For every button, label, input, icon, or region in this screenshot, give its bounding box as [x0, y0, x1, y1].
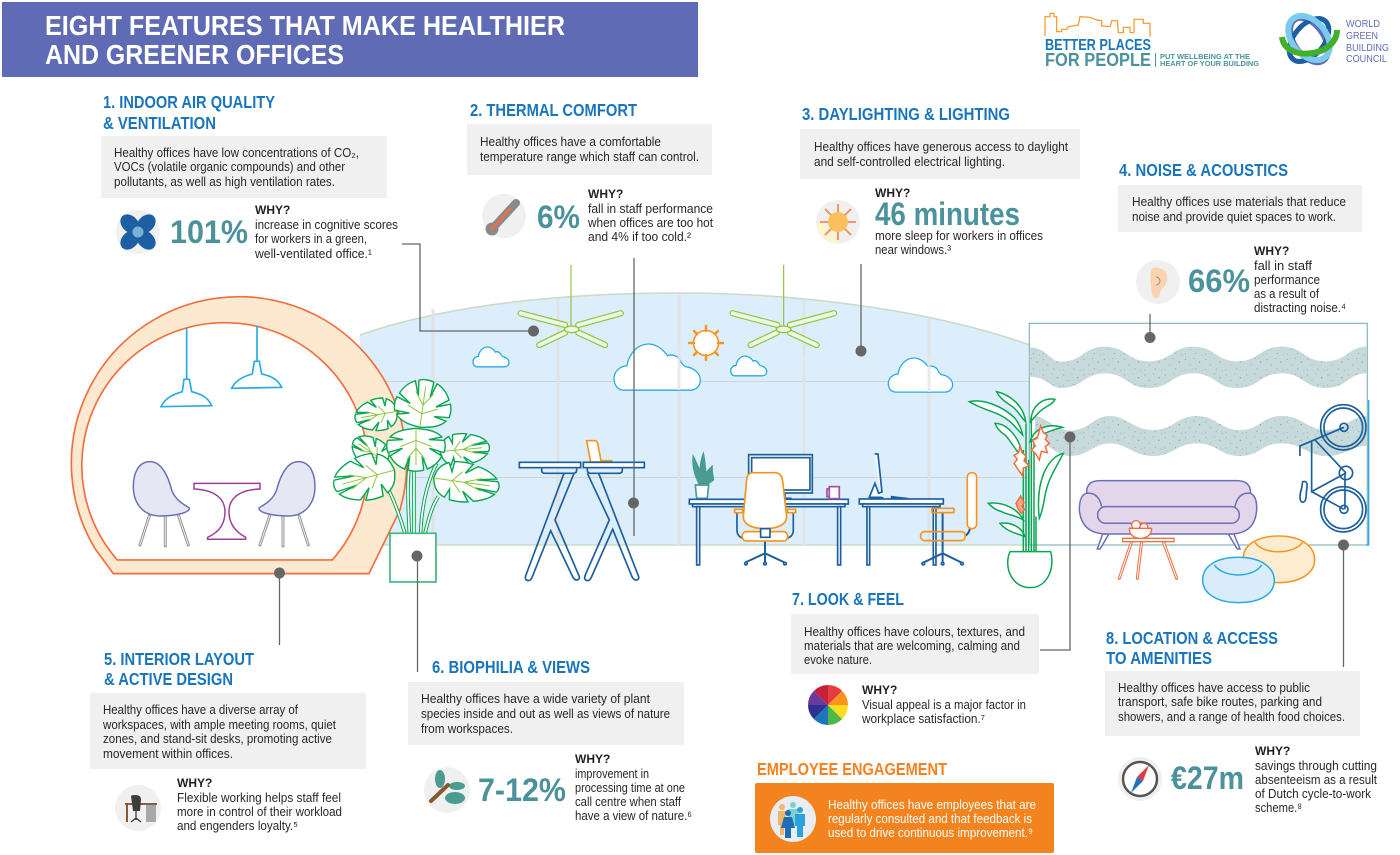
- panel: 7 look and feel: materials that are welcoming, calming and: [804, 639, 1020, 653]
- title banner: [2, 2, 698, 77]
- icon: fan: [116, 210, 160, 254]
- panel: 6 biophilia and views: Healthy offices have a wide variety of plant: [421, 692, 650, 706]
- panel: 5 interior layout and active design: movement within offices.: [103, 747, 233, 761]
- leader line: daylighting: [856, 264, 866, 356]
- panel: 7 look and feel: 7. LOOK & FEEL: [792, 589, 904, 609]
- illustration: pendant lamps: [161, 325, 282, 407]
- logo: better places for people: [1045, 13, 1259, 70]
- panel: 2 thermal comfort: [467, 100, 713, 244]
- leader line: interior layout: [274, 568, 285, 645]
- panel: 4 noise and acoustics: performance: [1254, 273, 1320, 287]
- panel: 3 daylighting and lighting: Healthy offices have generous access to daylight: [814, 140, 1068, 154]
- illustration: bean bags: [1203, 536, 1315, 603]
- panel: 8 location and access to amenities: Healthy offices have access to public: [1118, 681, 1310, 695]
- icon: compass: [1118, 757, 1162, 801]
- panel: 1 indoor air quality: & VENTILATION: [103, 113, 216, 133]
- panel: 5 interior layout and active design: 5. INTERIOR LAYOUT: [104, 649, 254, 669]
- panel: 6 biophilia and views: from workspaces.: [421, 722, 513, 736]
- logo: better places for people: PUT WELLBEING AT THE: [1160, 52, 1250, 61]
- panel: 5 interior layout and active design: zones, and stand-sit desks, promoting active: [103, 732, 332, 746]
- panel: 8 location and access to amenities: showers, and a range of health food choices.: [1118, 710, 1345, 724]
- panel: 8 location and access to amenities: TO AMENITIES: [1106, 648, 1212, 668]
- icon: desk and chair: [115, 785, 161, 831]
- panel: 8 location and access to amenities: transport, safe bike routes, parking and: [1118, 695, 1322, 709]
- panel: 2 thermal comfort: and 4% if too cold.²: [588, 230, 691, 244]
- logo: world green building council: BUILDING: [1346, 42, 1389, 54]
- panel: 1 indoor air quality: well-ventilated office.¹: [254, 247, 372, 261]
- panel: 4 noise and acoustics: distracting noise.⁴: [1254, 301, 1346, 315]
- panel: 3 daylighting and lighting: near windows.³: [875, 243, 951, 257]
- panel: 4 noise and acoustics: as a result of: [1254, 287, 1319, 301]
- panel: 1 indoor air quality: for workers in a green,: [255, 232, 367, 246]
- logo: better places for people: BETTER PLACES: [1045, 37, 1151, 54]
- illustration: tropical plant: [969, 392, 1063, 588]
- panel: 4 noise and acoustics: WHY?: [1254, 244, 1289, 258]
- panel: 6 biophilia and views: improvement in: [575, 767, 649, 781]
- panel: 6 biophilia and views: WHY?: [575, 752, 610, 766]
- panel: 1 indoor air quality: 101%: [170, 214, 248, 250]
- illustration: ceiling fans: [521, 265, 834, 345]
- leader line: location: [1338, 540, 1349, 667]
- panel: 7 look and feel: workplace satisfaction.⁷: [861, 712, 985, 726]
- panel: 8 location and access to amenities: 8. LOCATION & ACCESS: [1106, 628, 1278, 648]
- panel: 5 interior layout and active design: workspaces, with ample meeting rooms, quiet: [102, 718, 336, 732]
- illustration: meeting pod: [71, 297, 407, 574]
- panel: 4 noise and acoustics: fall in staff: [1254, 259, 1313, 273]
- panel: 1 indoor air quality: Healthy offices have low concentrations of CO₂,: [114, 146, 359, 160]
- panel: 1 indoor air quality: [101, 92, 398, 261]
- illustration: monstera plant: [328, 376, 502, 582]
- panel: 1 indoor air quality: pollutants, as well as high ventilation rates.: [114, 175, 335, 189]
- panel: employee engagement: Healthy offices have employees that are: [828, 798, 1036, 812]
- icon: colour wheel: [808, 685, 848, 725]
- panel: 7 look and feel: [791, 589, 1039, 726]
- panel: 3 daylighting and lighting: WHY?: [875, 186, 910, 200]
- panel: 8 location and access to amenities: of Dutch cycle-to-work: [1255, 787, 1372, 801]
- panel: employee engagement: [755, 759, 1054, 853]
- panel: 8 location and access to amenities: savings through cutting: [1255, 759, 1377, 773]
- panel: 5 interior layout and active design: and engenders loyalty.⁵: [177, 819, 298, 833]
- panel: 3 daylighting and lighting: 3. DAYLIGHTING & LIGHTING: [802, 104, 1010, 124]
- panel: 6 biophilia and views: species inside and out as well as views of nature: [421, 707, 670, 721]
- leader line: noise: [1144, 314, 1156, 343]
- leader line: look and feel: [1040, 432, 1076, 650]
- illustration: acoustic wall panels: [1029, 323, 1369, 545]
- logo: better places for people: HEART OF YOUR BUILDING: [1160, 59, 1259, 68]
- panel: 4 noise and acoustics: Healthy offices use materials that reduce: [1132, 195, 1346, 209]
- title banner: EIGHT FEATURES THAT MAKE HEALTHIER: [45, 10, 565, 41]
- panel: 3 daylighting and lighting: and self-controlled electrical lighting.: [814, 155, 1005, 169]
- logo: better places for people: FOR PEOPLE: [1045, 50, 1151, 70]
- icon: sun: [816, 200, 860, 244]
- panel: 7 look and feel: Visual appeal is a major factor in: [862, 698, 1026, 712]
- panel: 6 biophilia and views: processing time at one: [575, 781, 685, 795]
- panel: 4 noise and acoustics: 66%: [1188, 263, 1250, 299]
- illustration: meeting chairs and table: [133, 462, 315, 546]
- title banner: AND GREENER OFFICES: [45, 39, 344, 70]
- leader line: biophilia: [412, 550, 422, 672]
- leader line: thermal comfort: [628, 258, 639, 536]
- panel: 2 thermal comfort: WHY?: [588, 187, 623, 201]
- panel: 6 biophilia and views: 6. BIOPHILIA & VIEWS: [432, 657, 590, 677]
- leader line: air quality: [402, 244, 539, 336]
- panel: 8 location and access to amenities: [1105, 628, 1377, 815]
- panel: 7 look and feel: WHY?: [862, 683, 897, 697]
- illustration: sun in window: [689, 326, 723, 360]
- panel: 1 indoor air quality: VOCs (volatile organic compounds) and other: [114, 160, 345, 174]
- panel: 5 interior layout and active design: WHY?: [177, 776, 212, 790]
- panel: employee engagement: EMPLOYEE ENGAGEMENT: [757, 759, 947, 779]
- logo: world green building council: GREEN: [1346, 30, 1378, 42]
- panel: 2 thermal comfort: fall in staff performance: [588, 202, 713, 216]
- illustration: second desk with side chair: [859, 454, 977, 565]
- panel: 2 thermal comfort: 6%: [537, 199, 580, 235]
- panel: 5 interior layout and active design: [90, 649, 366, 833]
- panel: 2 thermal comfort: 2. THERMAL COMFORT: [470, 100, 637, 120]
- icon: ear: [1136, 260, 1180, 304]
- illustration: office desk with monitor and chair: [689, 454, 848, 565]
- panel: 8 location and access to amenities: WHY?: [1255, 744, 1290, 758]
- panel: 8 location and access to amenities: absenteeism as a result: [1255, 773, 1377, 787]
- panel: 6 biophilia and views: 7-12%: [478, 772, 566, 808]
- panel: 5 interior layout and active design: Healthy offices have a diverse array of: [103, 703, 298, 717]
- panel: 2 thermal comfort: when offices are too hot: [587, 216, 713, 230]
- illustration: standing desks and laptop: [519, 441, 644, 581]
- panel: 3 daylighting and lighting: more sleep for workers in offices: [875, 229, 1043, 243]
- illustration: wall-mounted bicycle: [1300, 405, 1366, 532]
- icon: people: [770, 796, 816, 842]
- icon: thermometer: [482, 194, 526, 238]
- panel: 5 interior layout and active design: & ACTIVE DESIGN: [104, 669, 233, 689]
- panel: 6 biophilia and views: have a view of nature.⁶: [575, 809, 692, 823]
- logo: world green building council: WORLD: [1346, 18, 1380, 30]
- panel: 1 indoor air quality: WHY?: [255, 203, 290, 217]
- panel: 6 biophilia and views: [408, 657, 692, 823]
- panel: 8 location and access to amenities: €27m: [1171, 760, 1244, 796]
- panel: 1 indoor air quality: 1. INDOOR AIR QUALITY: [103, 92, 275, 112]
- panel: 2 thermal comfort: temperature range which staff can control.: [480, 150, 699, 164]
- icon: leaf branch: [424, 767, 470, 813]
- panel: 7 look and feel: evoke nature.: [804, 653, 872, 667]
- panel: 3 daylighting and lighting: [800, 104, 1080, 257]
- panel: 3 daylighting and lighting: 46 minutes: [875, 196, 1020, 232]
- panel: 2 thermal comfort: Healthy offices have a comfortable: [480, 135, 661, 149]
- panel: 4 noise and acoustics: [1118, 160, 1362, 315]
- panel: 1 indoor air quality: increase in cognitive scores: [255, 218, 398, 232]
- panel: 8 location and access to amenities: scheme.⁸: [1255, 801, 1302, 815]
- panel: 6 biophilia and views: call centre when staff: [575, 795, 681, 809]
- panel: 5 interior layout and active design: Flexible working helps staff feel: [177, 791, 341, 805]
- panel: employee engagement: regularly consulted and that feedback is: [828, 812, 1032, 826]
- illustration: window wall with sky: [360, 293, 1030, 545]
- panel: 4 noise and acoustics: noise and provide quiet spaces to work.: [1132, 210, 1336, 224]
- panel: 7 look and feel: Healthy offices have colours, textures, and: [804, 625, 1025, 639]
- logo: world green building council: COUNCIL: [1346, 53, 1387, 65]
- logo: world green building council: [1280, 8, 1389, 69]
- illustration: sofa and coffee table: [1079, 481, 1257, 578]
- panel: employee engagement: used to drive continuous improvement.⁹: [828, 826, 1033, 840]
- panel: 5 interior layout and active design: more in control of their workload: [177, 805, 342, 819]
- panel: 4 noise and acoustics: 4. NOISE & ACOUSTICS: [1119, 160, 1288, 180]
